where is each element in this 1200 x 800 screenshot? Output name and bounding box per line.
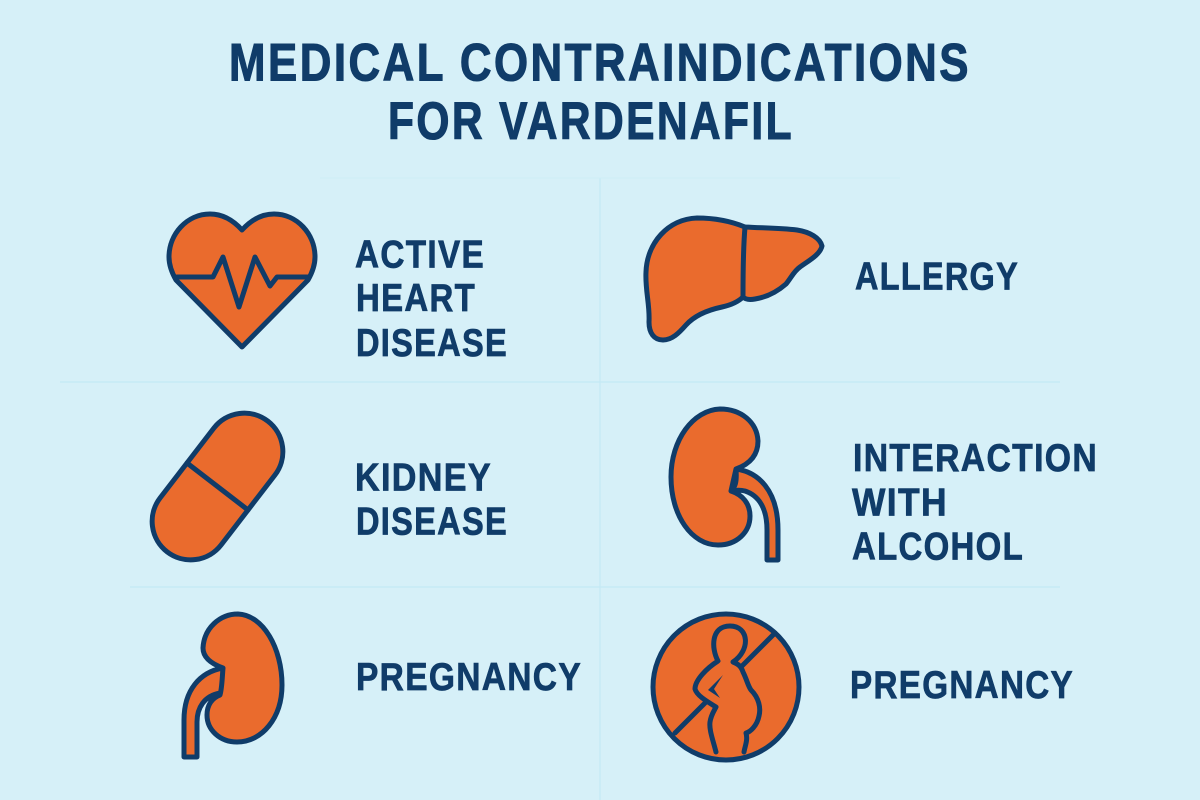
panel: kidney disease [137,398,508,575]
icon: heart with pulse line [169,214,315,347]
label: kidney disease: DISEASE [356,500,508,544]
panel: pregnancy left [184,614,582,757]
label: active heart disease: ACTIVE [355,234,485,276]
label: kidney disease: KIDNEY [355,456,492,500]
label: kidney disease [355,456,508,544]
panel: pregnancy right [653,614,1074,760]
panel: allergy [646,218,1019,340]
icon: kidney facing left with ureter [671,409,778,560]
title [229,34,971,151]
title: MEDICAL CONTRAINDICATIONS [229,34,971,92]
icon: liver [646,218,822,340]
label: interaction with alcohol: INTERACTION [853,437,1098,480]
label: allergy: ALLERGY [855,256,1019,298]
label: pregnancy right: PREGNANCY [850,664,1074,707]
icon: kidney facing right with ureter [184,614,282,757]
label: interaction with alcohol: ALCOHOL [852,526,1024,568]
label: active heart disease [355,234,508,365]
panel: interaction with alcohol [671,409,1098,568]
panel: active heart disease [169,214,508,365]
label: interaction with alcohol [852,437,1098,568]
label: interaction with alcohol: WITH [852,482,948,524]
label: pregnancy left: PREGNANCY [356,656,582,699]
title: FOR VARDENAFIL [388,92,794,151]
label: active heart disease: DISEASE [356,322,508,365]
label: active heart disease: HEART [356,277,476,320]
icon: crossed-out pregnant figure [653,614,799,760]
icon: capsule pill [137,398,298,575]
